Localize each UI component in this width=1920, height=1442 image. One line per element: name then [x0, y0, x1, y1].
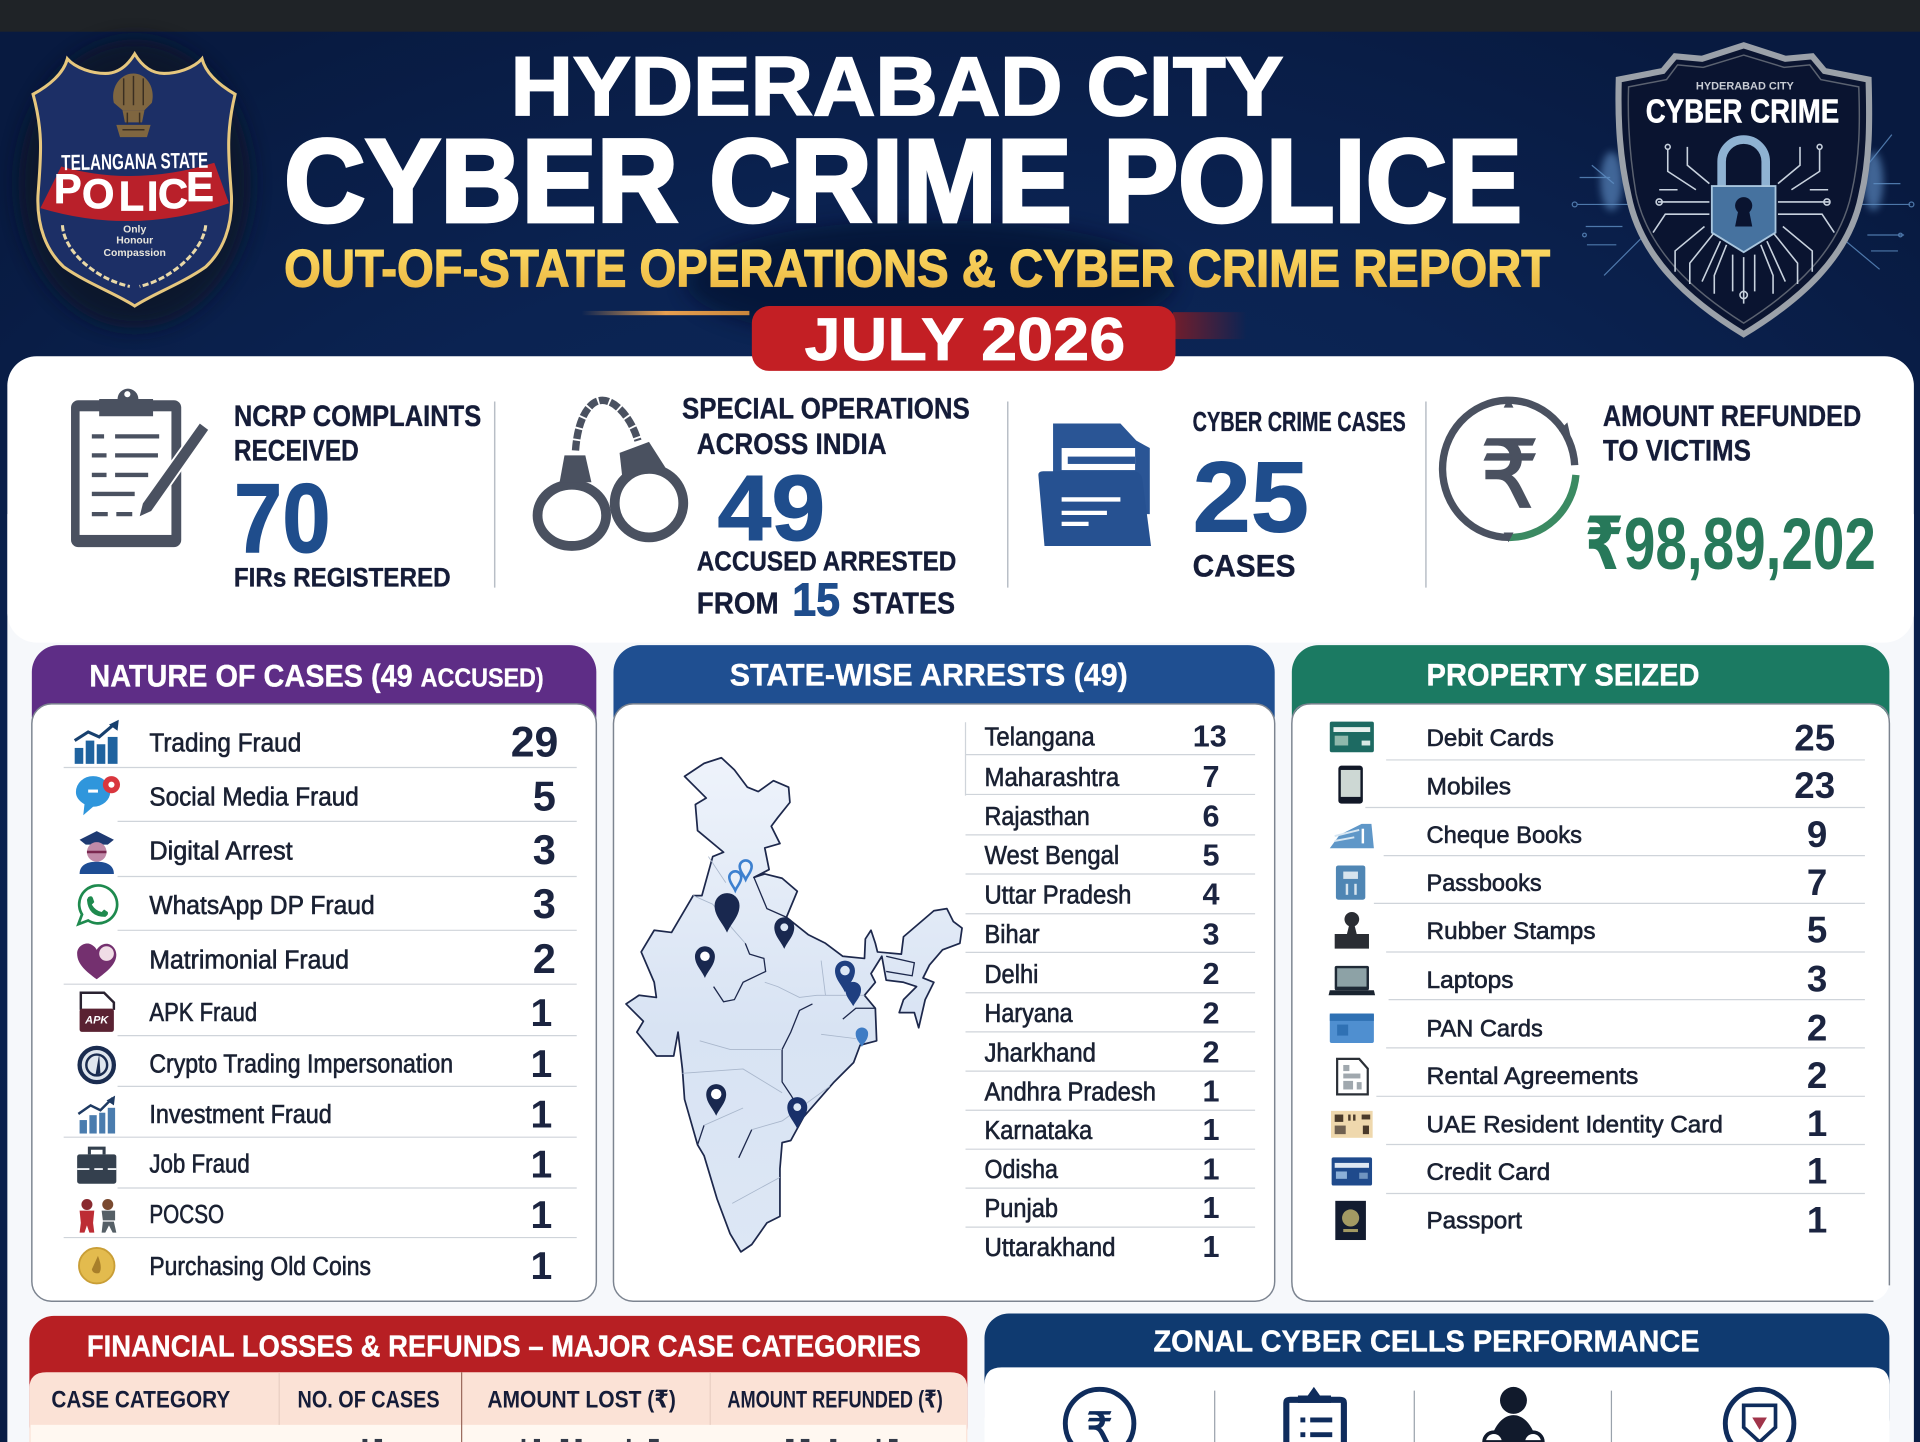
row: Credit Card: 1 — [1807, 1151, 1827, 1192]
stat label line 2: TO VICTIMS — [1603, 434, 1751, 467]
row: WhatsApp DP Fraud: 3 — [533, 880, 556, 927]
state table: Andhra Pradesh — [984, 1078, 1156, 1106]
stat label: CYBER CRIME CASES — [1193, 406, 1406, 437]
row: Job Fraud — [77, 1144, 552, 1187]
row: WhatsApp DP Fraud — [78, 880, 556, 927]
state table: Delhi — [984, 961, 1038, 989]
row: Purchasing Old Coins — [79, 1245, 552, 1288]
icon: crypto coin — [80, 1048, 114, 1082]
state table: 2 — [1203, 1036, 1220, 1070]
row: Mobiles: Mobiles — [1427, 773, 1511, 800]
row: Job Fraud: 1 — [530, 1144, 552, 1187]
state table: Uttar Pradesh — [984, 881, 1131, 909]
panel body — [1292, 704, 1889, 1301]
row: Trading Fraud — [75, 719, 558, 766]
page body underlay — [7, 514, 1914, 1442]
state table: Karnataka — [984, 1117, 1093, 1145]
circuit lines — [1653, 144, 1834, 304]
row: APK Fraud — [80, 992, 552, 1035]
row: Passport: Passport — [1427, 1207, 1522, 1234]
icon: debit card — [1330, 722, 1374, 752]
state table: 13 — [1193, 720, 1227, 754]
shield body — [1618, 45, 1869, 334]
icon: chat bubble — [76, 776, 120, 815]
row: Investment Fraud: 1 — [530, 1093, 552, 1136]
row: POCSO: POCSO — [149, 1201, 224, 1229]
card surface — [7, 356, 1914, 643]
icon: trading chart — [75, 720, 119, 764]
icon: rubber stamp — [1335, 912, 1369, 949]
summary card — [7, 356, 1914, 643]
gold accent line — [582, 311, 749, 315]
motto: Compassion — [104, 248, 166, 259]
state table: 3 — [1203, 917, 1220, 951]
panel: property seized — [1292, 645, 1889, 1301]
title line 1: HYDERABAD CITY — [511, 40, 1283, 133]
state table: 1 — [1203, 1191, 1220, 1225]
state table: Punjab — [984, 1195, 1058, 1223]
panel header — [984, 1313, 1889, 1442]
table header row: AMOUNT REFUNDED (₹) — [727, 1387, 943, 1414]
panel header — [1292, 645, 1889, 743]
icon: gold coin — [79, 1248, 114, 1283]
icon: id card — [1331, 1111, 1373, 1138]
motto: Honour — [116, 236, 153, 247]
row: Investment Fraud: Investment Fraud — [149, 1101, 332, 1129]
panel body — [984, 1367, 1889, 1442]
shield label: CYBER CRIME — [1646, 93, 1839, 130]
panel title: ZONAL CYBER CELLS PERFORMANCE — [1153, 1324, 1700, 1358]
stat: special operations — [538, 393, 970, 626]
stat sublabel: FIRs REGISTERED — [234, 562, 451, 592]
icon: rupee cycle — [1443, 398, 1576, 542]
icon: children — [80, 1199, 116, 1233]
state table: 5 — [1203, 838, 1220, 872]
row: Purchasing Old Coins: 1 — [530, 1245, 552, 1288]
row: Passbooks: Passbooks — [1427, 870, 1542, 897]
row: Credit Card: Credit Card — [1427, 1159, 1550, 1186]
row: UAE Resident Identity Card — [1331, 1103, 1827, 1144]
row: Rubber Stamps: Rubber Stamps — [1427, 918, 1596, 945]
row: Crypto Trading Impersonation: 1 — [530, 1043, 552, 1086]
row: Passport — [1335, 1200, 1827, 1241]
row: Debit Cards: 25 — [1794, 717, 1835, 758]
row: Rental Agreements — [1337, 1055, 1827, 1096]
row: Cheque Books — [1330, 814, 1827, 855]
state table: West Bengal — [984, 842, 1119, 870]
emblem — [113, 73, 153, 137]
table header row: AMOUNT LOST (₹) — [487, 1387, 676, 1414]
icon: apk file — [80, 993, 114, 1032]
icon: passbook — [1336, 865, 1365, 900]
stat label line 2: RECEIVED — [234, 434, 359, 467]
stat value: 70 — [234, 463, 331, 573]
row: APK Fraud: APK Fraud — [149, 999, 257, 1027]
row: APK Fraud: 1 — [530, 992, 552, 1035]
row: Digital Arrest: Digital Arrest — [149, 837, 293, 865]
row: WhatsApp DP Fraud: WhatsApp DP Fraud — [149, 892, 375, 920]
red glow — [1173, 312, 1247, 339]
row: PAN Cards: PAN Cards — [1427, 1015, 1543, 1042]
circuit glow — [1572, 135, 1914, 275]
table header row: CASE CATEGORY — [51, 1387, 230, 1414]
panel body — [613, 704, 1275, 1301]
row: Rubber Stamps: 5 — [1807, 910, 1827, 951]
icon: rupee circle — [1065, 1389, 1134, 1442]
panel header — [613, 645, 1275, 743]
stat: amount refunded — [1443, 398, 1876, 585]
badge shield — [33, 54, 235, 306]
icon: shield circle — [1725, 1389, 1794, 1442]
row: UAE Resident Identity Card: 1 — [1807, 1103, 1827, 1144]
date text: JULY 2026 — [804, 306, 1125, 373]
icon: rupee cycle: ₹ — [1480, 423, 1539, 527]
icon: investment chart — [78, 1096, 115, 1134]
states count: 15 — [792, 574, 840, 626]
row: Purchasing Old Coins: Purchasing Old Coins — [149, 1253, 371, 1281]
stat label line 2: ACROSS INDIA — [697, 428, 887, 461]
dark glow behind subtitle — [686, 220, 1176, 343]
padlock — [1712, 140, 1776, 252]
stat: cyber crime cases — [1038, 406, 1406, 584]
row: PAN Cards — [1330, 1007, 1827, 1048]
shield small text: HYDERABAD CITY — [1696, 80, 1795, 92]
map of India — [626, 758, 962, 1252]
state table: Telangana — [984, 723, 1095, 751]
state table: 6 — [1203, 799, 1220, 833]
state table — [984, 720, 1227, 1264]
row: Trading Fraud: Trading Fraud — [149, 730, 301, 758]
state table: 1 — [1203, 1152, 1220, 1186]
shield inner edge — [1628, 55, 1859, 323]
icon: apk file: APK — [84, 1014, 109, 1026]
row: Digital Arrest — [80, 826, 556, 874]
subtitle: OUT-OF-STATE OPERATIONS & CYBER CRIME REPORT — [284, 239, 1550, 298]
wreath — [62, 225, 206, 286]
table header row: NO. OF CASES — [298, 1387, 440, 1414]
row: Laptops — [1329, 959, 1827, 1000]
panel: financial losses — [29, 1316, 967, 1442]
panel: nature of cases — [32, 645, 596, 1301]
row: Debit Cards — [1330, 717, 1835, 758]
row: UAE Resident Identity Card: UAE Resident Identity Card — [1427, 1111, 1723, 1138]
police word: POLICE — [54, 163, 214, 220]
state table: Haryana — [984, 1000, 1073, 1028]
row: Cheque Books: 9 — [1807, 814, 1827, 855]
state table: 1 — [1203, 1230, 1220, 1264]
row: Debit Cards: Debit Cards — [1427, 725, 1554, 752]
icon: clipboard — [71, 389, 209, 547]
row: Rental Agreements: 2 — [1807, 1055, 1827, 1096]
state table: Bihar — [984, 921, 1040, 949]
state table: 4 — [1203, 878, 1220, 912]
stat sublabel: ACCUSED ARRESTED — [697, 545, 956, 576]
stat label: SPECIAL OPERATIONS — [682, 393, 970, 426]
icon: briefcase — [77, 1148, 116, 1184]
table header row — [29, 1372, 967, 1442]
state table: Odisha — [984, 1156, 1059, 1184]
stat sublabel line 2: FROM — [697, 586, 779, 620]
icon: handcuffs — [538, 400, 683, 546]
panel body — [32, 704, 596, 1301]
stat sublabel: CASES — [1193, 548, 1296, 584]
state table: 2 — [1203, 957, 1220, 991]
stat: NCRP complaints — [71, 389, 481, 592]
stat label: AMOUNT REFUNDED — [1603, 400, 1861, 433]
title — [284, 40, 1550, 298]
row: Crypto Trading Impersonation: Crypto Trading Impersonation — [149, 1050, 453, 1078]
row: Digital Arrest: 3 — [533, 826, 556, 873]
state name: TELANGANA STATE — [61, 148, 208, 175]
row: Matrimonial Fraud: Matrimonial Fraud — [149, 946, 349, 974]
icon: officer figure — [1484, 1387, 1543, 1442]
motto — [104, 225, 166, 259]
row: Cheque Books: Cheque Books — [1427, 822, 1582, 849]
panel header — [32, 645, 596, 743]
icon: cheque book — [1330, 824, 1374, 848]
state table: Rajasthan — [984, 803, 1090, 831]
row: Rental Agreements: Rental Agreements — [1427, 1063, 1638, 1090]
row: Laptops: Laptops — [1427, 967, 1513, 994]
icon: passport — [1335, 1201, 1366, 1240]
map outline — [626, 758, 962, 1252]
row: Investment Fraud — [78, 1093, 552, 1136]
date pill — [752, 306, 1176, 373]
row: Matrimonial Fraud: 2 — [533, 935, 556, 982]
state table: 1 — [1203, 1075, 1220, 1109]
top dark bar — [0, 0, 1920, 32]
icon: clipboard — [1283, 1387, 1347, 1442]
row: Passbooks: 7 — [1807, 862, 1827, 903]
row: Trading Fraud: 29 — [511, 719, 558, 766]
table first row — [31, 1425, 966, 1442]
icon: folder — [1038, 424, 1151, 546]
panel: state-wise arrests — [613, 645, 1275, 1301]
row: Passbooks — [1336, 862, 1827, 903]
row: Mobiles — [1338, 765, 1835, 806]
row: POCSO: 1 — [530, 1194, 552, 1237]
icon: pan card — [1330, 1014, 1374, 1043]
state table: Jharkhand — [984, 1039, 1096, 1067]
row: Job Fraud: Job Fraud — [149, 1151, 250, 1179]
state boundaries — [698, 877, 914, 1158]
panel title: PROPERTY SEIZED — [1427, 657, 1700, 692]
title line 2: CYBER CRIME POLICE — [284, 116, 1522, 247]
stat value: 25 — [1193, 441, 1309, 553]
row: Social Media Fraud — [76, 772, 556, 819]
panel header — [29, 1316, 967, 1442]
row: PAN Cards: 2 — [1807, 1007, 1827, 1048]
stat value: 49 — [718, 456, 825, 560]
row: Crypto Trading Impersonation — [80, 1043, 552, 1086]
row: Credit Card — [1332, 1151, 1827, 1192]
panel title: FINANCIAL LOSSES & REFUNDS – MAJOR CASE CATEGORIES — [87, 1329, 921, 1363]
motto: Only — [123, 225, 146, 236]
panel title: NATURE OF CASES (49 ACCUSED) — [89, 658, 544, 694]
icon: heart — [77, 944, 116, 979]
row: Mobiles: 23 — [1794, 765, 1835, 806]
icon: whatsapp — [78, 885, 117, 924]
row: Social Media Fraud: Social Media Fraud — [149, 783, 359, 811]
row: POCSO — [80, 1194, 552, 1237]
states word: STATES — [852, 586, 955, 620]
red band — [40, 163, 229, 221]
icon: document — [1337, 1059, 1368, 1094]
state table: Uttarakhand — [984, 1234, 1116, 1262]
icon: laptop — [1329, 966, 1375, 995]
row: Rubber Stamps — [1335, 910, 1827, 951]
stat label: NCRP COMPLAINTS — [234, 400, 481, 433]
row: Matrimonial Fraud — [77, 935, 556, 982]
row: Laptops: 3 — [1807, 959, 1827, 1000]
icon: mobile — [1338, 766, 1363, 804]
icon: credit card — [1332, 1157, 1372, 1186]
icon: officer — [80, 831, 114, 874]
cyber crime shield — [1572, 45, 1914, 334]
row: Passport: 1 — [1807, 1200, 1827, 1241]
row: Social Media Fraud: 5 — [533, 772, 556, 819]
state table: Maharashtra — [984, 764, 1120, 792]
panel: zonal cyber cells — [984, 1313, 1889, 1442]
state table: 7 — [1203, 760, 1220, 794]
state table: 2 — [1203, 996, 1220, 1030]
panel title: STATE-WISE ARRESTS (49) — [730, 657, 1128, 692]
police badge — [18, 39, 251, 328]
panel border — [1292, 704, 1889, 1301]
map pins — [695, 860, 868, 1129]
state table: 1 — [1203, 1113, 1220, 1147]
